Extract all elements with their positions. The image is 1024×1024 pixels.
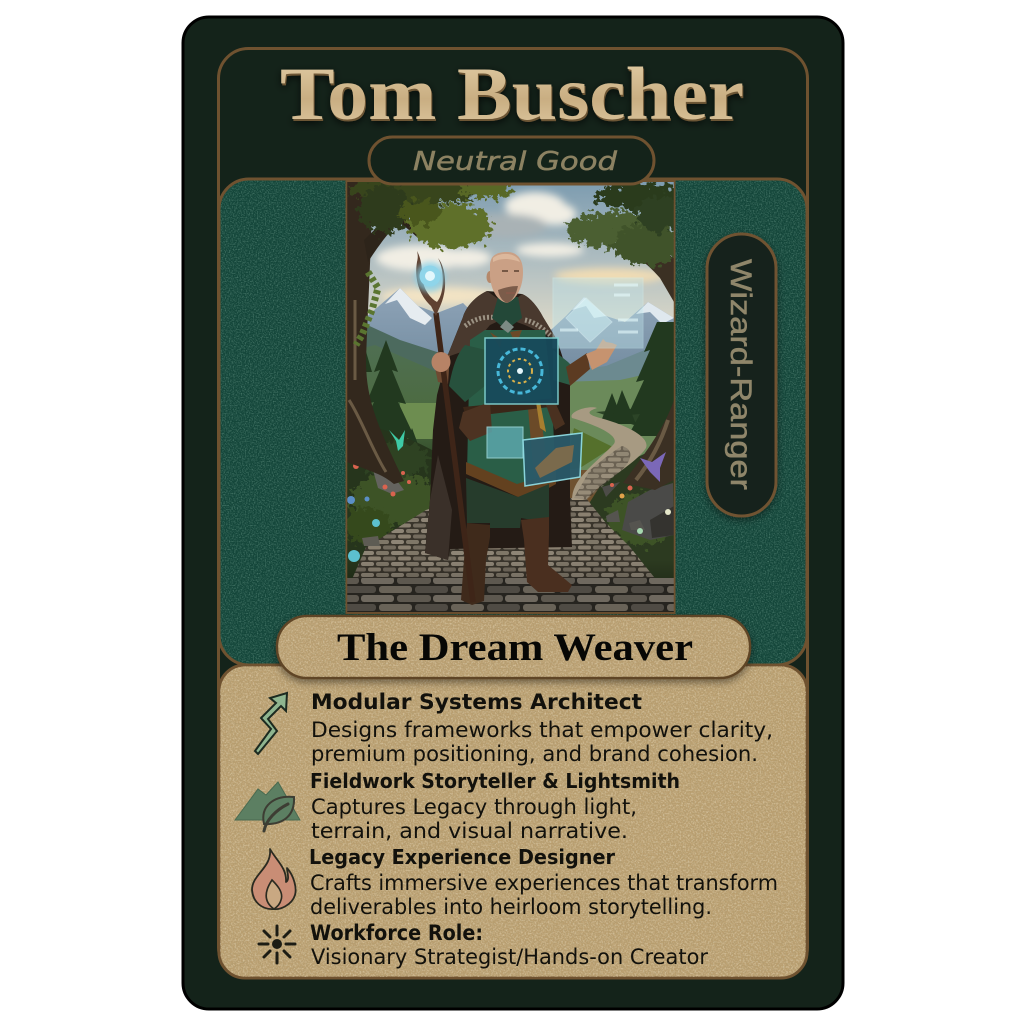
- class pill: Wizard-Ranger: Wizard-Ranger: [724, 259, 757, 490]
- ability text: Fieldwork Storyteller: terrain, and visual narrative.: [311, 819, 628, 843]
- ability text: Modular Systems Architect: [311, 690, 773, 766]
- ability text: Modular Systems Architect: premium positioning, and brand cohesion.: [311, 742, 758, 766]
- rocks: [622, 483, 674, 540]
- ability text: Fieldwork Storyteller: Fieldwork Storyteller & Lightsmith: [310, 769, 680, 793]
- ability text: Workforce Role: [310, 921, 708, 969]
- ability text: Fieldwork Storyteller: Captures Legacy through light,: [311, 795, 637, 819]
- ability text: Fieldwork Storyteller: [310, 769, 680, 843]
- ability text: Workforce Role: Visionary Strategist/Hands-on Creator: [311, 945, 708, 969]
- staff: [412, 251, 466, 555]
- panel: green felt portrait backing: [219, 179, 807, 665]
- hills: [366, 326, 437, 372]
- ability text: Modular Systems Architect: Designs frameworks that empower clarity,: [311, 718, 773, 742]
- banner: The Dream Weaver: The Dream Weaver: [337, 626, 693, 669]
- floating holographic panels: [485, 278, 643, 486]
- title: Tom Buscher: [280, 53, 744, 136]
- legs and boots: [466, 478, 549, 528]
- ability text: Legacy Experience Designer: deliverables into heirloom storytelling.: [310, 895, 712, 919]
- flowers: [347, 496, 671, 562]
- belt & pouch: [463, 404, 558, 414]
- panel: abilities: [219, 665, 807, 978]
- icon: mountains and leaf: [235, 782, 300, 831]
- illustration: wizard-ranger portrait: [344, 172, 684, 620]
- left tree: [347, 182, 404, 484]
- right tree: [623, 256, 674, 490]
- ability text: Modular Systems Architect: Modular Systems Architect: [311, 690, 642, 714]
- head: [486, 252, 523, 303]
- cobblestone road: [352, 498, 654, 578]
- inner gold frame: [218, 48, 808, 978]
- fairies: [389, 430, 405, 451]
- distant mountains: [367, 288, 468, 354]
- ability text: Legacy Experience Designer: Legacy Experience Designer: [309, 845, 615, 869]
- alignment pill: Neutral Good: [369, 137, 654, 184]
- title: Tom Buscher: [281, 55, 745, 138]
- class pill: Wizard-Ranger: [707, 234, 776, 516]
- alignment pill: Neutral Good: Neutral Good: [413, 147, 618, 177]
- icon: lightning arrow: [255, 693, 287, 754]
- firs: [366, 322, 674, 443]
- ground: [347, 438, 432, 578]
- figure: cloak: [425, 291, 572, 560]
- ability text: Workforce Role: Workforce Role:: [310, 921, 483, 945]
- card background: [183, 17, 843, 1009]
- ability text: Legacy Experience Designer: Crafts immersive experiences that transform: [310, 871, 778, 895]
- banner: The Dream Weaver: [277, 616, 750, 678]
- ability text: Legacy Experience Designer: [309, 845, 778, 919]
- icon: flame: [252, 849, 296, 909]
- icon: sun: [259, 926, 295, 963]
- tunic: [467, 330, 556, 496]
